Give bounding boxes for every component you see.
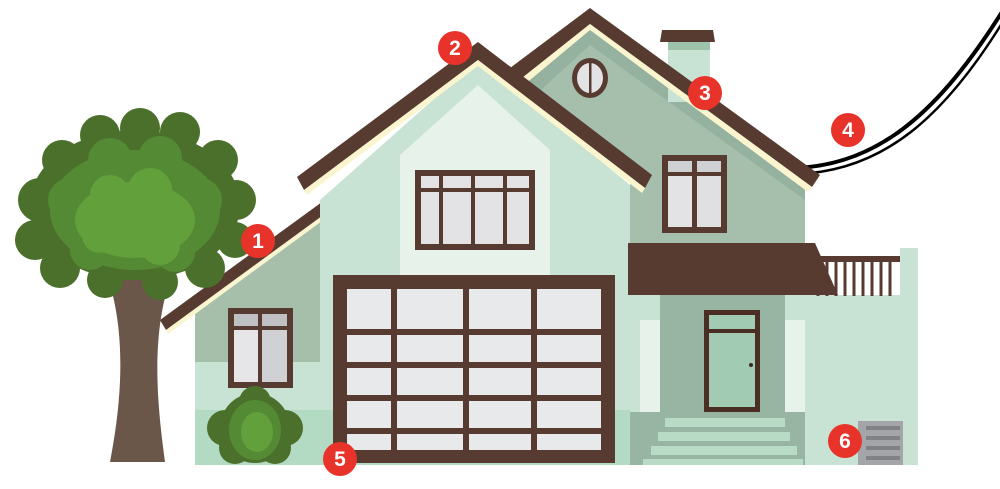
upper main window [415,170,535,250]
main gable wall [320,60,630,465]
badge 1 [241,224,275,258]
left wing wall [160,202,330,465]
badge 4 [831,113,865,147]
badge 6: 6 [839,430,851,453]
badge 6 [828,424,862,458]
badge 3 [688,76,722,110]
badge 3: 3 [699,82,711,105]
badge 5: 5 [334,448,346,471]
right wing wall and railing [805,248,918,465]
main roof [297,42,652,195]
badge 2: 2 [449,37,461,60]
porch roof [628,243,838,295]
front door [704,310,760,412]
badge 2 [438,31,472,65]
left window [228,308,293,388]
garage door [333,275,615,463]
badge 1: 1 [252,230,264,253]
tree [15,108,256,462]
badge 4: 4 [842,119,854,142]
right roof [510,8,820,192]
badge 5 [323,442,357,476]
porch [630,295,805,465]
right upper window [662,155,727,233]
right gable wall [520,24,805,300]
steps [643,418,803,465]
chimney [660,30,715,102]
bush [207,386,303,464]
power wire [795,12,1000,174]
vent [858,421,903,465]
round window [572,58,608,98]
